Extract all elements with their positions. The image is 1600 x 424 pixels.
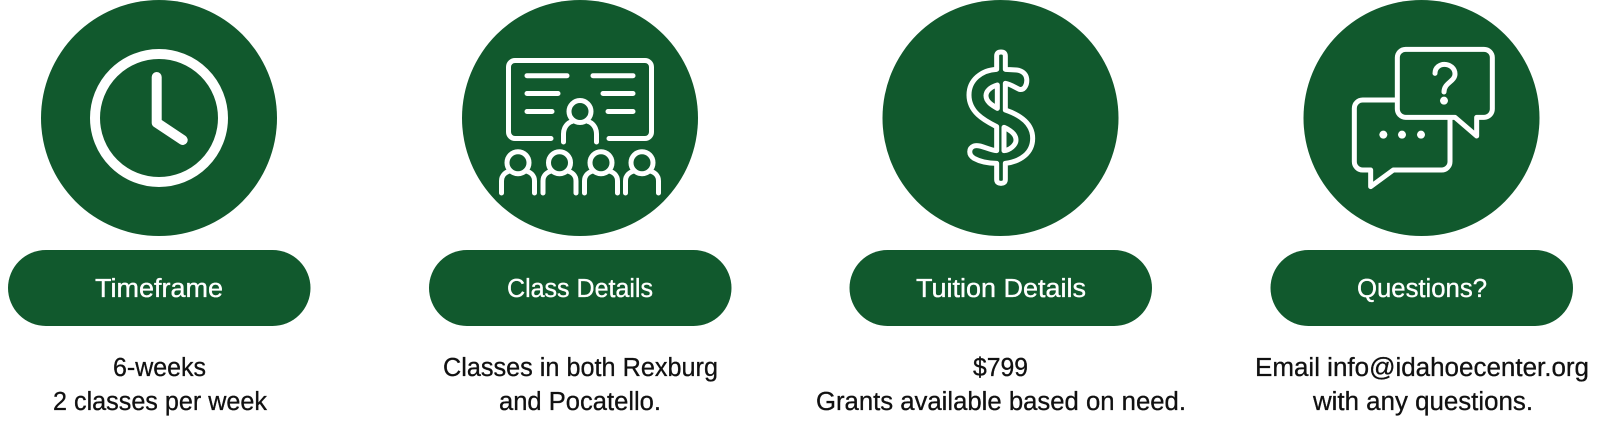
text block: class locations: Classes in both Rexburg [443,354,718,382]
text block: timeframe details: 6-weeks [113,354,206,382]
green circle: tuition details [882,0,1118,236]
pill heading: Timeframe: Timeframe [95,275,223,303]
pill heading: Class Details: Class Details [507,275,653,303]
text block: tuition and grants [816,354,1186,416]
icon: classroom with presenter and students [502,60,658,193]
text block: contact email: with any questions. [1312,388,1533,416]
panel: questions [1255,0,1589,416]
panel: class details [429,0,732,416]
icon: dollar sign [969,52,1033,183]
text block: timeframe details [53,354,267,416]
text block: class locations [443,354,718,416]
panel: tuition details [816,0,1186,416]
text block: class locations: and Pocatello. [499,388,661,416]
green circle: class details [462,0,698,236]
text block: timeframe details: 2 classes per week [53,388,267,416]
text block: tuition and grants: $799 [973,354,1028,382]
green circle: timeframe [41,0,277,236]
pill heading: Questions? [1270,250,1573,326]
text block: tuition and grants: Grants available based on need. [816,388,1186,416]
pill heading: Timeframe [8,250,310,326]
icon: clock [95,54,223,182]
panel: timeframe [8,0,310,416]
text block: contact email [1255,354,1589,416]
text block: contact email: Email info@idahoecenter.org [1255,354,1589,382]
pill heading: Class Details [429,250,732,326]
pill heading: Questions?: Questions? [1357,275,1487,303]
pill heading: Tuition Details [850,250,1152,326]
pill heading: Tuition Details: Tuition Details [916,275,1086,303]
green circle: questions [1304,0,1540,236]
icon: speech bubbles [1354,49,1492,187]
